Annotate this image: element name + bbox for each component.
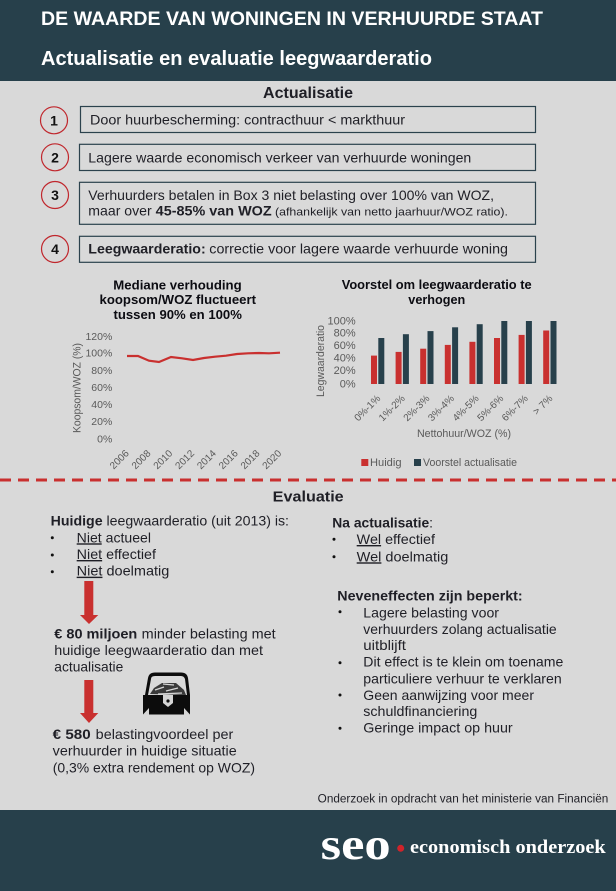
source note: Onderzoek in opdracht van het ministerie van Financiën	[318, 794, 608, 806]
legend: Voorstel actualisatie	[423, 457, 517, 469]
step 3: (afhankelijk van netto jaarhuur/WOZ ratio).	[275, 207, 508, 219]
bar chart x axis title: Nettohuur/WOZ (%)	[417, 428, 511, 440]
line chart title: tussen 90% en 100%	[114, 307, 242, 322]
step 1: Door huurbescherming: contracthuur < markthuur	[90, 112, 405, 128]
bar chart y axis labels: 80%	[334, 328, 356, 340]
text: 580 euro: verhuurder in huidige situatie	[53, 743, 237, 759]
y axis labels: 40%	[91, 399, 112, 411]
step 1: 1	[50, 112, 58, 128]
bullet list: Niet actueel	[77, 529, 151, 545]
step 3: maar over	[88, 203, 152, 219]
arrow down 2	[80, 680, 98, 723]
step 3: 45-85% van WOZ	[156, 203, 272, 219]
line chart title	[100, 277, 257, 322]
panel: neveneffecten: Neveneffecten zijn beperkt:	[337, 588, 523, 604]
bar chart y axis labels: 0%	[340, 378, 356, 390]
footer band with logo	[0, 810, 616, 891]
text: 80 miljoen: € 80 miljoen	[54, 625, 137, 641]
x axis labels: 2010	[152, 448, 176, 472]
bar chart x axis labels: 6%-7%	[500, 393, 531, 424]
heading: Evaluatie: Evaluatie	[273, 489, 344, 506]
bullet list: Niet doelmatig	[77, 563, 169, 579]
bar chart title: verhogen	[408, 292, 465, 307]
bar chart y axis labels: 20%	[334, 365, 356, 377]
panel: neveneffecten: Lagere belasting voor	[363, 604, 499, 620]
panel: na actualisatie: Wel doelmatig	[357, 548, 448, 564]
panel: na actualisatie: Na actualisatie:	[332, 514, 433, 530]
y axis labels: 80%	[91, 365, 112, 377]
data line	[127, 353, 280, 362]
text: 80 miljoen: actualisatie	[54, 659, 124, 675]
step 4: correctie voor lagere waarde verhuurde woning	[209, 240, 508, 256]
bar chart x axis labels: 4%-5%	[451, 393, 482, 424]
panel: neveneffecten: Geringe impact op huur	[363, 720, 513, 736]
heading: Actualisatie: Actualisatie	[263, 85, 353, 102]
step 2: 2	[51, 150, 59, 166]
bar chart x axis labels: 3%-4%	[426, 393, 457, 424]
bar chart y axis labels: 40%	[334, 353, 356, 365]
panel: neveneffecten	[337, 588, 564, 736]
x axis labels: 2018	[239, 448, 263, 472]
text: 580 euro: (0,3% extra rendement op WOZ)	[53, 759, 255, 775]
bar chart y axis labels	[328, 316, 356, 390]
panel: na actualisatie: Wel effectief	[357, 531, 435, 547]
text: 80 miljoen	[54, 625, 276, 675]
legend: Huidig	[370, 457, 402, 469]
text: 580 euro	[53, 726, 255, 775]
bar chart x axis labels: 1%-2%	[377, 393, 408, 424]
step 2	[42, 144, 536, 171]
text: 580 euro: belastingvoordeel per	[96, 726, 234, 742]
panel: neveneffecten: uitblijft	[363, 637, 406, 653]
bar chart: leegwaarderatio	[315, 277, 556, 469]
line chart: koopsom/WOZ	[72, 277, 284, 472]
step 3: Verhuurders betalen in Box 3 niet belasting over 100% van WOZ,	[88, 187, 494, 203]
header band with titles	[0, 0, 616, 81]
bullet list	[51, 529, 169, 579]
bullet list: Niet effectief	[77, 546, 156, 562]
red bars: huidig	[371, 330, 549, 384]
title: DE WAARDE VAN WONINGEN IN VERHUURDE STAAT	[41, 8, 543, 30]
bar chart y axis labels: 100%	[328, 316, 356, 328]
step 3	[42, 182, 536, 224]
line chart title: koopsom/WOZ fluctueert	[100, 292, 257, 307]
bar chart y axis title: Legwaarderatio	[315, 325, 327, 397]
y axis labels: 100%	[85, 348, 112, 360]
x axis labels: 2012	[174, 448, 197, 472]
icon: treasure chest	[143, 672, 190, 714]
bar chart y axis labels: 60%	[334, 340, 356, 352]
step 1	[40, 106, 536, 134]
panel: huidige leegwaarderatio	[51, 513, 289, 775]
bar chart x axis labels: 0%-1%	[353, 393, 383, 424]
y axis labels: 120%	[85, 331, 112, 343]
panel: neveneffecten: particuliere verhuur te verklaren	[363, 670, 562, 686]
y axis labels: 20%	[91, 416, 112, 428]
x axis labels	[108, 448, 284, 472]
arrow down 1	[80, 581, 98, 624]
y axis labels	[85, 331, 112, 446]
step 4: Leegwaarderatio:	[88, 240, 206, 256]
x axis labels: 2006	[108, 448, 132, 472]
step 4: 4	[51, 241, 59, 257]
dark bars: voorstel actualisatie	[378, 321, 556, 384]
bar chart title	[342, 277, 532, 307]
x axis labels: 2016	[217, 448, 241, 472]
step 3: 3	[51, 187, 59, 203]
bar chart title: Voorstel om leegwaarderatio te	[342, 277, 532, 292]
y axis labels: 0%	[97, 434, 112, 446]
panel: neveneffecten: Dit effect is te klein om toename	[363, 654, 564, 670]
x axis labels: 2020	[261, 448, 284, 472]
panel: neveneffecten: schuldfinanciering	[363, 703, 477, 719]
y axis title: Koopsom/WOZ (%)	[72, 343, 84, 433]
step 2: Lagere waarde economisch verkeer van verhuurde woningen	[88, 149, 471, 165]
logo: seo: seo	[321, 820, 391, 869]
intro text: Huidige leegwaarderatio (uit 2013) is:	[51, 513, 289, 529]
logo dot	[397, 845, 404, 852]
bar chart x axis labels: 5%-6%	[476, 393, 506, 424]
text: 80 miljoen: minder belasting met	[142, 625, 276, 641]
subtitle: Actualisatie en evaluatie leegwaarderatio	[41, 48, 432, 70]
panel: na actualisatie	[332, 514, 448, 564]
bar chart x axis labels	[353, 393, 555, 424]
step 4	[42, 236, 536, 262]
logo tagline: economisch onderzoek	[410, 837, 606, 858]
text: 580 euro: € 580	[53, 726, 91, 742]
text: 80 miljoen: huidige leegwaarderatio dan met	[54, 642, 263, 658]
y axis labels: 60%	[91, 382, 112, 394]
panel: neveneffecten: Geen aanwijzing voor meer	[363, 687, 534, 703]
x axis labels: 2014	[195, 448, 219, 472]
panel: neveneffecten: verhuurders zolang actualisatie	[363, 621, 557, 637]
legend	[361, 457, 517, 469]
bar chart x axis labels: 2%-3%	[402, 393, 432, 424]
x axis labels: 2008	[130, 448, 154, 472]
line chart title: Mediane verhouding	[113, 277, 242, 292]
bar chart x axis labels: > 7%	[531, 393, 555, 417]
